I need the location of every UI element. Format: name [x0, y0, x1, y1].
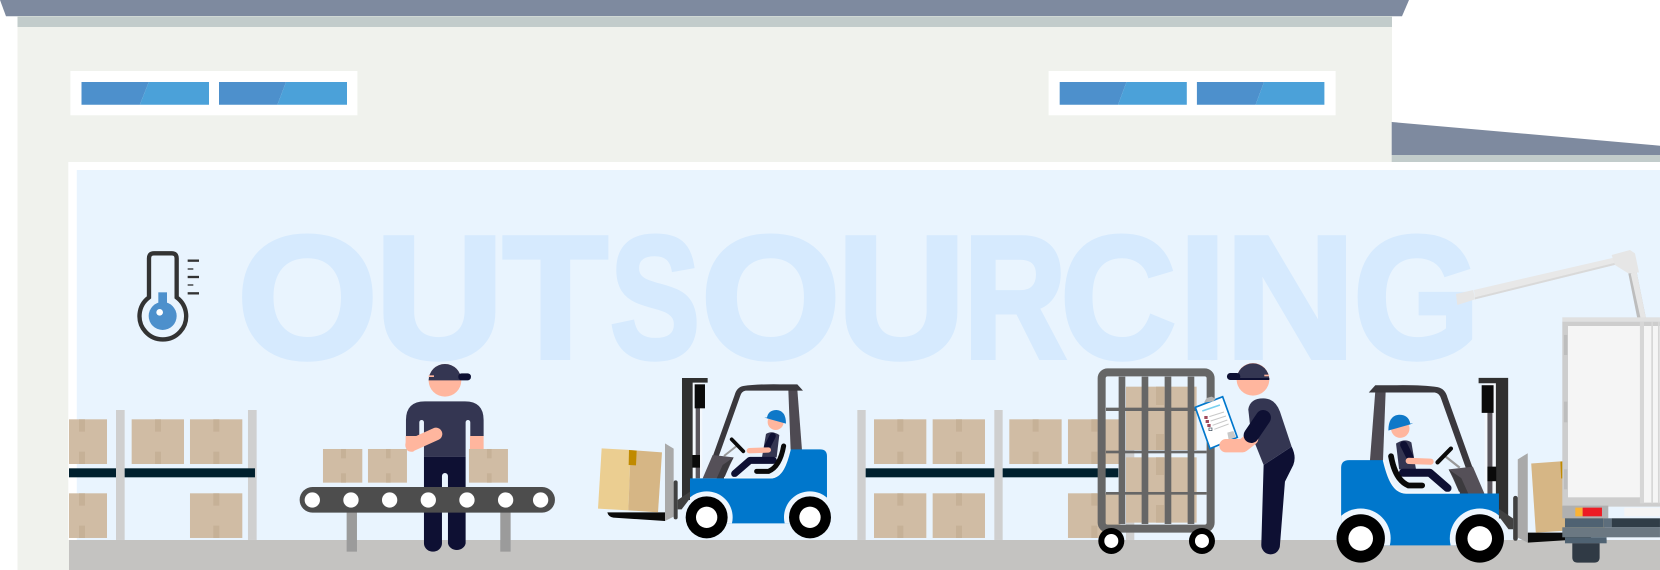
watermark title: N [1225, 200, 1356, 394]
conveyor belt [300, 449, 555, 552]
worker with clipboard [1195, 363, 1295, 554]
truck with crane arm [1456, 250, 1660, 563]
watermark title: G [1353, 200, 1480, 394]
side roof [1392, 122, 1660, 155]
watermark title: U [375, 200, 504, 394]
window left [70, 71, 357, 115]
worker at conveyor [406, 364, 484, 552]
watermark title: T [503, 200, 608, 394]
watermark title: S [610, 200, 700, 394]
floor [69, 540, 1660, 570]
watermark title: R [964, 200, 1066, 394]
roll cage with boxes [1098, 372, 1215, 554]
forklift left [598, 378, 836, 543]
shelf right with boxes [857, 410, 1134, 540]
icon: thermometer [139, 253, 199, 339]
side roof band [1392, 155, 1660, 162]
roof [0, 0, 1409, 16]
window right [1049, 71, 1336, 115]
loading bay opening [68, 162, 1660, 540]
watermark title: U [837, 200, 966, 394]
watermark title: O [701, 200, 840, 394]
roof shadow band [18, 16, 1392, 27]
forklift right [1331, 378, 1605, 568]
watermark title: O [237, 200, 378, 394]
shelf left with boxes [69, 410, 257, 540]
watermark title: I [1179, 200, 1226, 394]
clipboard [1195, 397, 1237, 449]
watermark title: C [1060, 200, 1176, 394]
